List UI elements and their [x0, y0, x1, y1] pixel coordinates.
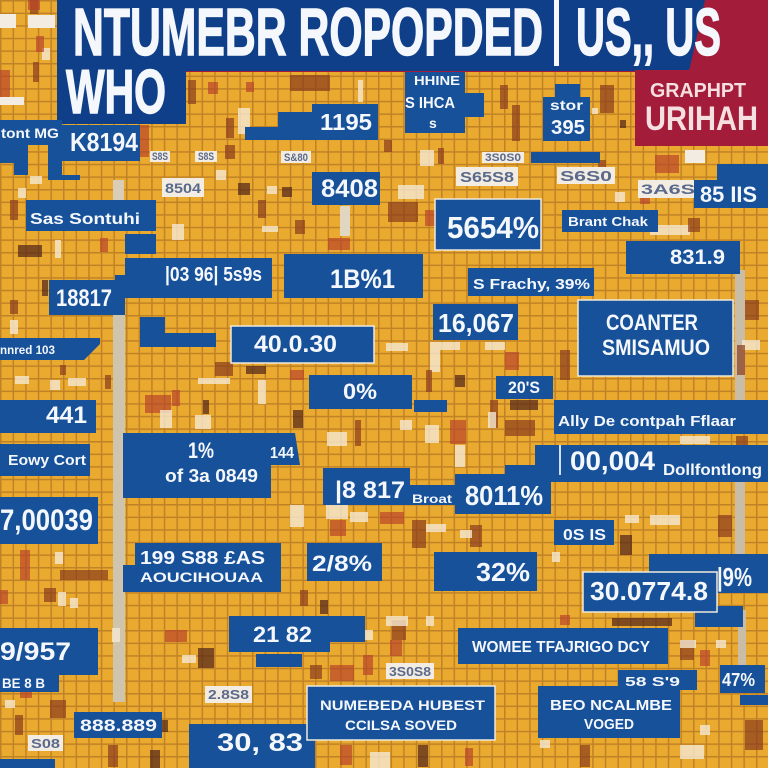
panel: 32%: 32%: [476, 557, 530, 587]
panel: 32%: [434, 552, 537, 591]
small white labels: S&80: [284, 152, 308, 164]
panel: Hiine: HHINE: [414, 73, 460, 88]
small white labels: S8S: [152, 151, 168, 163]
panel: 85 IIS: 85 IIS: [700, 182, 757, 207]
panel: 1195: 1195: [320, 109, 372, 135]
panel: 58 9: [618, 670, 697, 690]
panel: 0%: 0%: [343, 379, 377, 404]
panel: 2005: 20'S: [508, 378, 540, 397]
panel: 1% of 3a 0849: 1%: [188, 438, 214, 463]
panel: 8011%: 8011%: [465, 480, 543, 511]
panel: 199 888: AOUCIHOUAA: [140, 569, 263, 585]
panel: 8194: K8194: [70, 127, 138, 157]
panel: Coanter: COANTER: [606, 310, 698, 335]
panel: 831.9: 831.9: [670, 246, 725, 269]
panel: 103 96: |03 96| 5s9s: [165, 264, 262, 286]
panel: stor 395: 395: [551, 117, 585, 139]
small blue tab: [256, 654, 302, 667]
small white labels: S8S: [198, 151, 214, 163]
panel: 30.0774.8: [583, 572, 717, 612]
panel: Brant Chak: [562, 210, 658, 232]
panel: 8194: [62, 125, 140, 161]
red corner panel: [635, 70, 768, 146]
panel: Ally De: Ally De contpah Fflaar: [558, 413, 736, 430]
title line two: WHO: [66, 58, 166, 127]
panel: 1% of 3a 0849: [123, 433, 300, 498]
panel: 21 82: 21 82: [253, 622, 312, 647]
red panel kicker: GRAPHPT: [650, 80, 746, 102]
blue tab: [740, 695, 768, 705]
panel: Coanter: SMISAMUO: [602, 335, 710, 360]
panel: 0S IS: 0S IS: [563, 527, 606, 544]
panel: Ally De: [554, 400, 768, 434]
panel: Womee: [458, 628, 668, 664]
panel: BE B: BE 8 B: [2, 675, 45, 691]
panel: Beo: [538, 686, 680, 738]
panel: 18%: [284, 254, 423, 298]
panel: Numebeda: [307, 686, 495, 740]
panel: 9/957: 9/957: [0, 638, 71, 666]
panel: S Frachy: S Frachy, 39%: [473, 276, 590, 293]
panel: Coanter: [578, 300, 733, 376]
panel: 00.004: 00,004: [570, 446, 655, 476]
panel: Beo: BEO NCALMBE: [550, 697, 672, 714]
panel: stor 395: [543, 84, 590, 141]
panel: Eowy Cort: Eowy Cort: [8, 452, 86, 469]
panel: 103 96: [115, 258, 272, 298]
panel: 19%: |9%: [717, 562, 752, 592]
panel: 888.889: [74, 712, 162, 738]
blue stepped shape: [140, 317, 216, 347]
small white labels: 2.8S8: [208, 687, 249, 702]
panel: 441: [0, 400, 96, 433]
panel: 2/8%: [307, 543, 382, 581]
small white labels: S08: [31, 736, 60, 751]
panel: 18817: 18817: [56, 285, 112, 312]
panel: 199 888: [123, 543, 281, 592]
panel: 47%: 47%: [722, 670, 755, 690]
panel: 441: 441: [46, 402, 87, 429]
panel: 16067: 16,067: [438, 308, 514, 338]
panel: S Frachy: [468, 268, 594, 296]
panel: 2/8%: 2/8%: [312, 551, 372, 576]
panel: Sas Sontuhi: Sas Sontuhi: [30, 211, 140, 228]
panel: Numebeda: CCILSA SOVED: [345, 717, 457, 733]
panel: 8408: [312, 172, 380, 205]
panel: 199 888: 199 S88 £AS: [140, 548, 265, 568]
panel: 00.004: [505, 445, 768, 482]
panel: road label: nnred 103: [0, 343, 55, 357]
small white labels: S6S0: [560, 168, 612, 185]
panel: 18817: [49, 280, 125, 315]
panel: Womee: WOMEE TFAJRIGO DCY: [472, 639, 650, 656]
panel: tont MG: tont MG: [1, 125, 59, 141]
panel: 47%: [720, 665, 765, 693]
panel: Hiine: [405, 72, 484, 133]
panel: BE B: [0, 672, 59, 692]
small white labels: 8504: [165, 180, 201, 196]
small white labels: S65S8: [460, 169, 514, 186]
panel: 2005: [496, 376, 553, 399]
panel: Brant Chak: Brant Chak: [568, 214, 649, 229]
panel: Hiine: S IHCA: [405, 95, 455, 112]
panel: 1195: [245, 104, 378, 140]
panel: 00.004: Dollfontlong: [663, 462, 762, 479]
small white labels: 3A6S: [641, 181, 695, 197]
small white labels: 3S0S8: [389, 664, 431, 679]
panel: Hiine: s: [429, 115, 437, 131]
panel: 19%: [649, 554, 768, 593]
small white labels: 3S0S0: [485, 152, 521, 164]
panel: 0%: [309, 375, 412, 409]
panel: 30, 83: 30, 83: [217, 729, 303, 757]
panel: 19 817: [323, 468, 410, 505]
panel: 7,00039: 7,00039: [0, 504, 93, 537]
blue tab: [695, 606, 743, 627]
panel: 58 9: 58 S'9: [625, 674, 680, 689]
small blue strip: [531, 152, 600, 163]
bottom left blue tab: [0, 759, 55, 768]
panel: 1% of 3a 0849: of 3a 0849: [165, 466, 258, 486]
panel: 831.9: [626, 241, 740, 274]
panel: 30.0774.8: 30.0774.8: [590, 576, 708, 606]
panel: 7,00039: [0, 497, 98, 544]
panel: 888.889: 888.889: [80, 716, 157, 735]
title banner: [57, 0, 768, 127]
panel: 19 817: |8 817: [335, 477, 405, 504]
panel: Sas Sontuhi: [26, 200, 156, 231]
panel: Eowy Cort: [0, 444, 90, 476]
panel: 40.0.30: [231, 326, 374, 363]
panel: tont MG: [0, 120, 80, 180]
panel: Beo: VOGED: [584, 716, 634, 733]
panel: 0S IS: [554, 520, 614, 545]
panel: Numebeda: NUMEBEDA HUBEST: [320, 697, 486, 713]
panel: 1% of 3a 0849: 144: [270, 445, 294, 462]
panel: 21 82: [229, 616, 365, 652]
panel: 5654%: 5654%: [447, 210, 539, 245]
panel: 8011%: [410, 474, 551, 514]
panel: 9/957: [0, 628, 98, 675]
title divider: [554, 0, 559, 66]
panel: 5654%: [435, 199, 541, 250]
panel: 85 IIS: [694, 164, 768, 208]
panel: road label: [0, 338, 100, 360]
panel: 8408: 8408: [321, 175, 378, 203]
panel: 40.0.30: 40.0.30: [254, 331, 337, 358]
small blue strip: [414, 400, 447, 412]
panel: stor 395: stor: [550, 97, 584, 113]
panel: 30, 83: [189, 724, 315, 768]
panel: 8011%: Broat: [412, 492, 452, 506]
panel: 18%: 1B%1: [330, 264, 395, 294]
small blue tab: [125, 234, 156, 254]
